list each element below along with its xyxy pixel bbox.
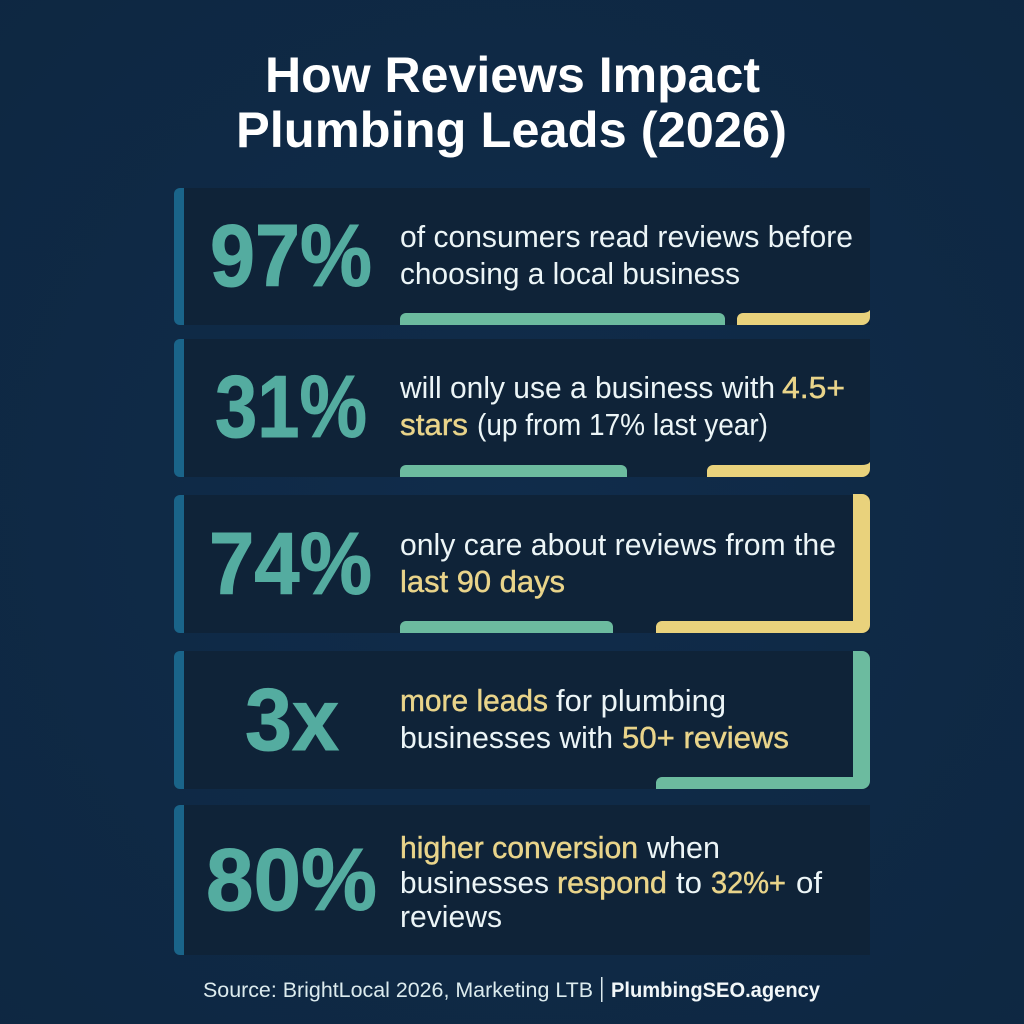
description: respond — [557, 866, 667, 900]
source footer: PlumbingSEO.agency — [611, 978, 820, 1002]
yellow progress bar — [707, 462, 870, 477]
description: 50+ reviews — [622, 721, 789, 755]
stat number: 80%: 80% — [206, 830, 377, 929]
green corner bar — [656, 651, 870, 789]
description: businesses — [400, 866, 549, 900]
description — [400, 684, 789, 755]
description: of consumers read reviews before — [400, 220, 853, 254]
description: when — [646, 831, 720, 865]
source footer — [203, 977, 820, 1002]
left accent bar — [174, 495, 184, 633]
description: (up from 17% last year) — [477, 408, 768, 442]
description: more leads — [400, 684, 548, 718]
description: for plumbing — [556, 684, 726, 718]
description: last 90 days — [400, 565, 565, 599]
title — [236, 47, 787, 158]
left accent bar — [174, 805, 184, 955]
left accent bar — [174, 651, 184, 789]
panel: 3x stat — [174, 651, 870, 789]
description: higher conversion — [400, 831, 638, 865]
panel: 97% stat — [174, 188, 870, 325]
description — [400, 528, 836, 599]
description — [400, 831, 823, 934]
left accent bar — [174, 188, 184, 325]
description: will only use a business with — [399, 371, 775, 405]
description: to — [676, 866, 702, 900]
panel: 31% stat — [174, 339, 870, 477]
stat number: 74%: 74% — [209, 514, 372, 613]
source footer: Source: BrightLocal 2026, Marketing LTB — [203, 978, 593, 1002]
left accent bar — [174, 339, 184, 477]
description: only care about reviews from the — [400, 528, 836, 562]
description: 32%+ — [711, 866, 786, 900]
stat number: 97%: 97% — [210, 206, 372, 305]
description: stars — [400, 408, 468, 442]
panel: 80% stat — [174, 805, 870, 955]
description: choosing a local business — [400, 257, 740, 291]
description — [400, 220, 853, 291]
green progress bar — [400, 313, 725, 325]
description: businesses with — [400, 721, 613, 755]
stat number: 3x: 3x — [245, 670, 339, 769]
title: How Reviews Impact — [265, 47, 760, 103]
panel: 74% stat — [174, 494, 870, 633]
description: 4.5+ — [782, 371, 845, 405]
green progress bar — [400, 465, 627, 477]
yellow progress bar — [737, 310, 870, 325]
description: of — [796, 866, 823, 900]
title: Plumbing Leads (2026) — [236, 102, 787, 158]
stat number: 31%: 31% — [215, 357, 367, 456]
green progress bar — [400, 621, 613, 633]
description — [399, 371, 845, 442]
description: reviews — [400, 900, 502, 934]
yellow corner bar — [656, 494, 870, 633]
